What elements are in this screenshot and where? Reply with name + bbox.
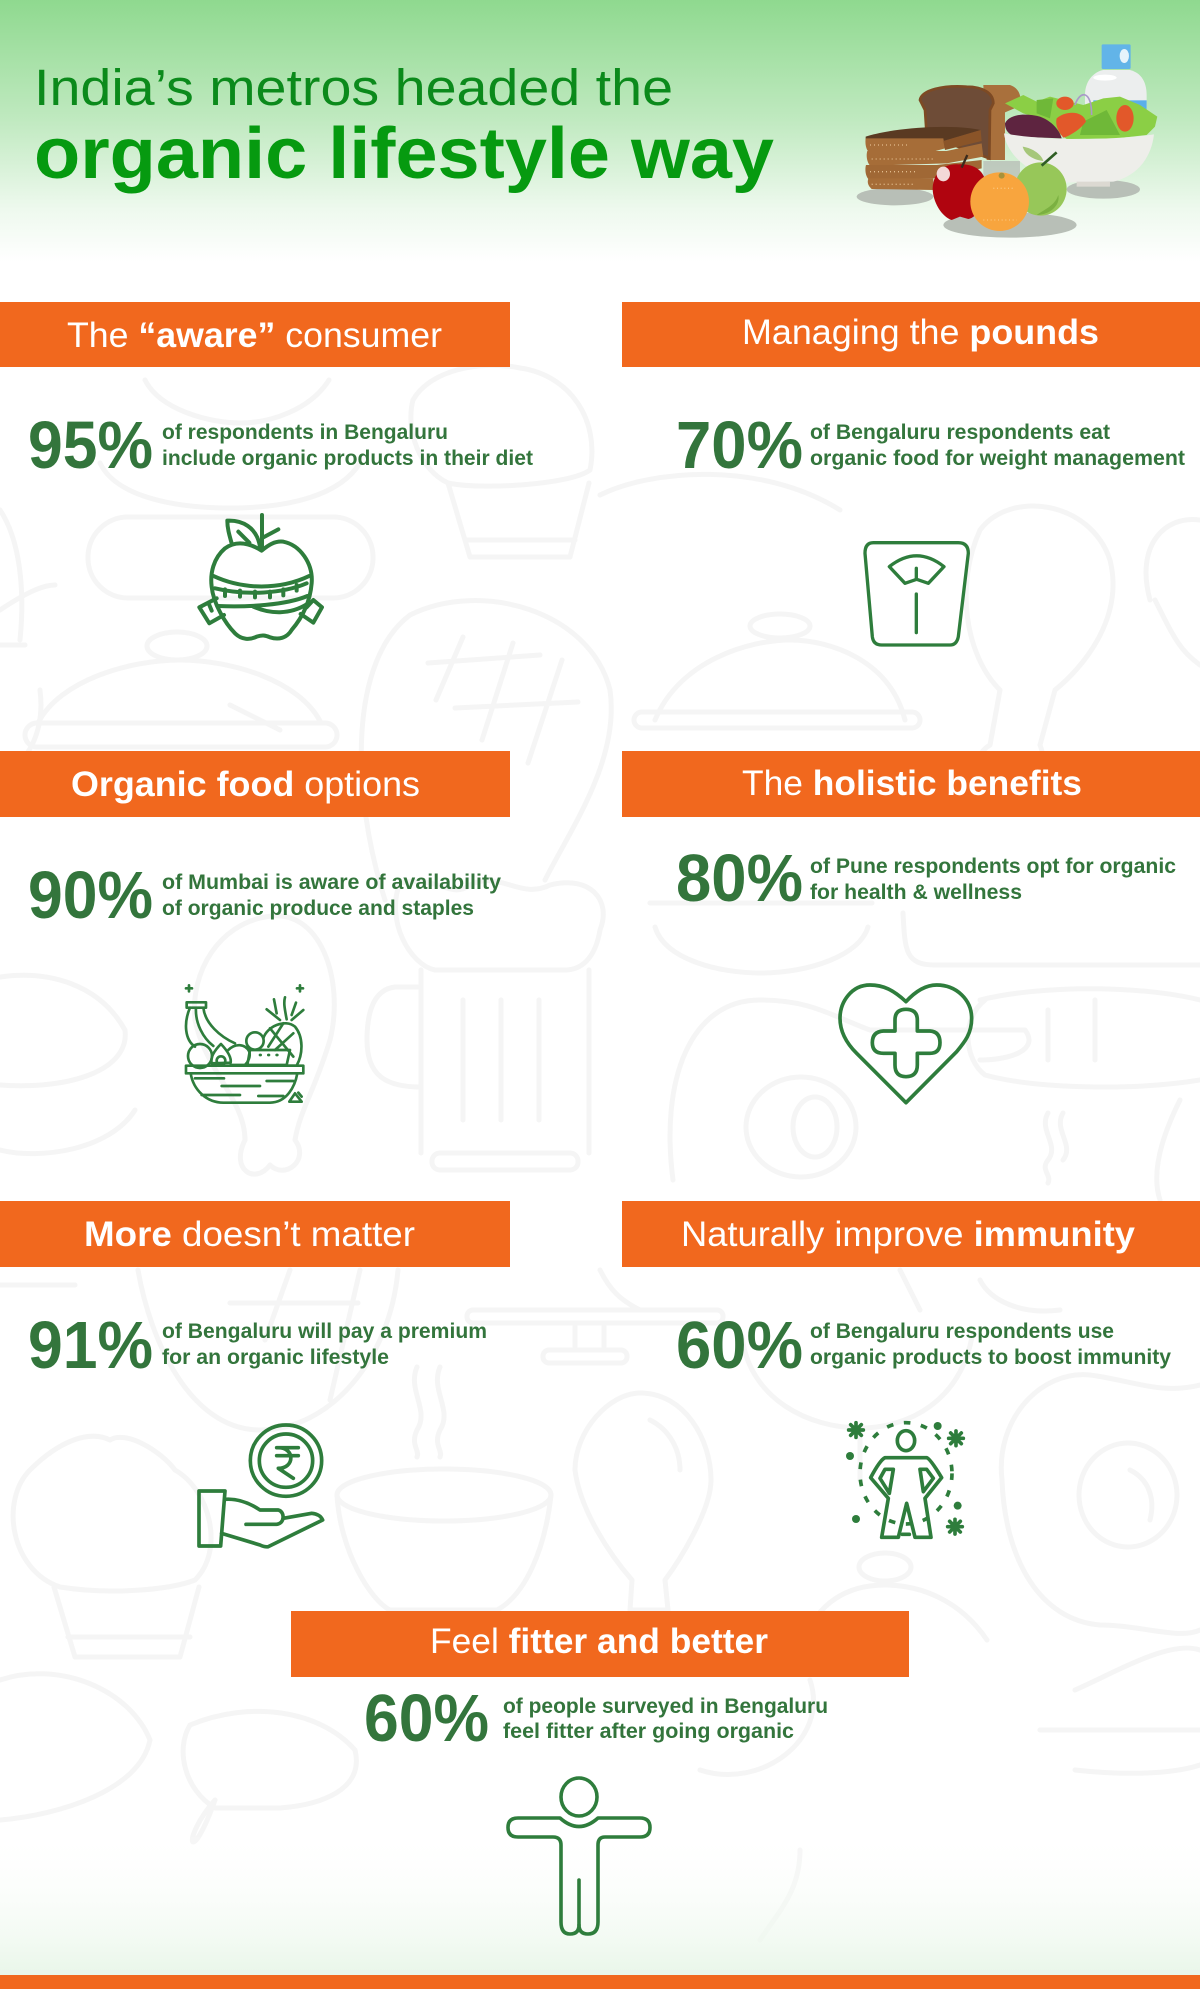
stat: 90 percent: 90% <box>28 858 153 933</box>
icon: rupee coin over hand <box>199 1425 323 1547</box>
icon: heart with cross <box>840 985 972 1103</box>
stat: 60 percent immunity: 60% <box>676 1308 803 1383</box>
stat: 70 percent: of Bengaluru respondents eat <box>810 421 1110 444</box>
icon: apple with measuring tape <box>199 515 322 639</box>
stat: 60 percent fitter: 60% <box>364 1681 489 1756</box>
stat: 95 percent: include organic products in their diet <box>162 447 533 470</box>
header bar: the holistic benefits: The holistic benefits <box>742 764 1082 803</box>
title <box>34 59 774 194</box>
stat: 90 percent: of Mumbai is aware of availability <box>162 871 501 894</box>
header bar: managing the pounds: Managing the pounds <box>742 313 1099 352</box>
top green gradient header <box>0 0 1200 262</box>
title: organic lifestyle way <box>34 114 774 194</box>
stat: 80 percent: 80% <box>676 841 803 916</box>
header bar: more doesn't matter: More doesn’t matter <box>84 1215 415 1254</box>
stat: 60 percent immunity: of Bengaluru respondents use <box>810 1320 1114 1343</box>
header bar: organic food options: Organic food options <box>71 765 420 804</box>
stat: 90 percent <box>28 858 501 933</box>
panel: managing the pounds <box>622 302 1200 645</box>
title: India’s metros headed the <box>34 59 673 116</box>
icon: person with outstretched arms <box>508 1778 650 1934</box>
stat: 60 percent fitter: of people surveyed in Bengaluru <box>503 1695 828 1718</box>
bottom green gradient <box>0 1830 1200 1975</box>
stat: 80 percent: for health & wellness <box>810 881 1022 904</box>
panel: organic food options <box>0 751 510 1103</box>
panel: more doesn't matter <box>0 1201 510 1547</box>
header bar: the holistic benefits <box>622 751 1200 817</box>
icon: weighing scale <box>865 543 968 645</box>
stat: 60 percent fitter: feel fitter after going organic <box>503 1720 794 1743</box>
stat: 95 percent <box>28 408 533 483</box>
stat: 95 percent: of respondents in Bengaluru <box>162 421 448 444</box>
stat: 70 percent: organic food for weight management <box>810 447 1185 470</box>
stat: 80 percent: of Pune respondents opt for organic <box>810 855 1176 878</box>
stat: 70 percent: 70% <box>676 408 803 483</box>
illustration: healthy food group <box>857 44 1157 238</box>
panel: naturally improve immunity <box>622 1201 1200 1537</box>
stat: 95 percent: 95% <box>28 408 153 483</box>
header bar: feel fitter and better <box>291 1611 909 1677</box>
panel: the aware consumer <box>0 302 533 639</box>
stat: 91 percent <box>28 1308 487 1383</box>
header bar: managing the pounds <box>622 302 1200 367</box>
stat: 90 percent: of organic produce and staples <box>162 897 474 920</box>
panel: the holistic benefits <box>622 751 1200 1103</box>
header bar: naturally improve immunity <box>622 1201 1200 1267</box>
stat: 60 percent fitter <box>364 1681 828 1756</box>
header bar: naturally improve immunity: Naturally improve immunity <box>681 1215 1136 1254</box>
header bar: more doesn't matter <box>0 1201 510 1267</box>
stat: 80 percent <box>676 841 1176 916</box>
stat: 91 percent: for an organic lifestyle <box>162 1346 389 1369</box>
stat: 60 percent immunity: organic products to boost immunity <box>810 1346 1171 1369</box>
header bar: organic food options <box>0 751 510 817</box>
stat: 91 percent: of Bengaluru will pay a premium <box>162 1320 487 1343</box>
bottom orange bar <box>0 1975 1200 1989</box>
icon: fruit basket <box>186 985 303 1103</box>
header bar: the aware consumer: The “aware” consumer <box>67 316 442 355</box>
stat: 91 percent: 91% <box>28 1308 153 1383</box>
panel: feel fitter and better <box>291 1611 909 1934</box>
stat: 70 percent <box>676 408 1185 483</box>
header bar: the aware consumer <box>0 302 510 367</box>
header bar: feel fitter and better: Feel fitter and better <box>430 1622 768 1661</box>
stat: 60 percent immunity <box>676 1308 1171 1383</box>
icon: person with immunity aura <box>846 1422 963 1537</box>
